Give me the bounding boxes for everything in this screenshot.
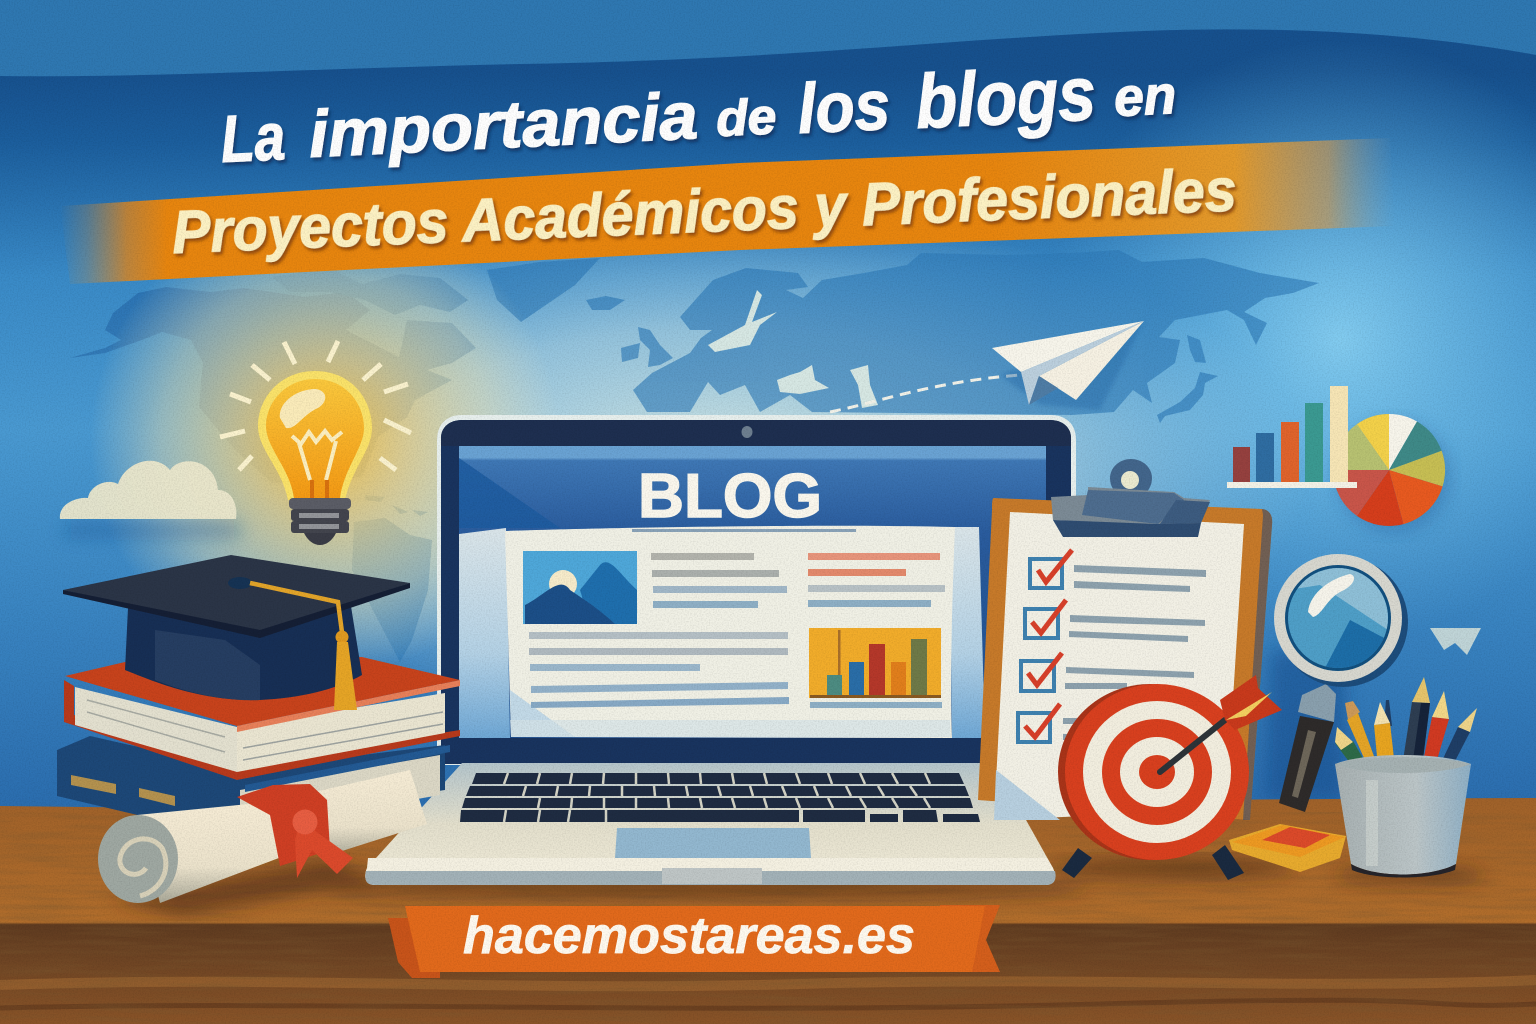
checklist boxes [1018,559,1062,742]
wall shadows [65,525,1345,800]
title line 1 [219,51,1178,176]
blue book [57,736,450,830]
laptop base [365,763,1055,885]
map: iceland [586,296,625,310]
pencil cup [1335,677,1477,878]
bottom ribbon: hacemostareas.es [463,907,915,965]
laptop lid [437,415,1076,765]
blog heading: BLOG [638,462,822,531]
title line 1: La [219,99,287,176]
clipboard clip [1051,459,1210,537]
map: greenland [487,258,600,322]
bulb rays [220,341,411,470]
map: south america [352,518,432,662]
pencils [1335,677,1477,767]
dashed flight path [830,375,1020,412]
graduation cap [63,555,410,710]
diploma scroll [98,770,427,903]
title line 2: Proyectos Académicos y Profesionales [171,156,1238,266]
title line 1: blogs [914,51,1098,145]
desk [0,798,1536,1024]
map: north america [70,287,476,483]
title line 1: los [796,66,892,148]
camera [742,426,752,438]
red ribbon seal [237,784,353,878]
target legs [1062,845,1244,880]
red book [64,657,460,780]
small white chevron [1430,628,1481,655]
screen side panels [459,528,510,738]
small book on desk [1229,824,1346,872]
title line 1: de [715,88,777,147]
world map [70,250,1319,662]
clipboard [978,459,1272,820]
chart: bars on shelf [1227,386,1357,488]
map: caribbean [365,495,428,516]
icon: magnifying glass [1274,554,1408,812]
map: eurasia [633,250,1319,415]
title line 1: en [1113,65,1178,128]
title line 1: importancia [307,78,699,171]
trackpad [615,828,811,858]
icon: cloud [60,461,236,519]
laptop [365,415,1076,885]
map: ireland [621,343,640,362]
desk shadows [110,858,1485,915]
light glow behind bulb [80,200,580,680]
article text lines [529,553,945,708]
map: uk [638,327,673,367]
map: japan [1157,335,1218,423]
map: inland seas [708,290,878,408]
icon: paper plane [992,321,1144,410]
blog page [505,526,955,738]
keyboard [460,773,980,822]
chart: pie [1333,414,1450,532]
blog thumbnail [523,551,637,624]
checklist lines [1063,565,1206,740]
bottom ribbon [388,905,1000,978]
icon: light bulb [220,341,411,545]
stack of books [57,555,460,830]
screen [459,446,1046,738]
screen bar chart [809,628,941,698]
orange title banner [60,138,1395,284]
checkmarks [1025,550,1072,737]
target with arrow [1058,675,1282,880]
map: arctic islands [272,268,468,315]
